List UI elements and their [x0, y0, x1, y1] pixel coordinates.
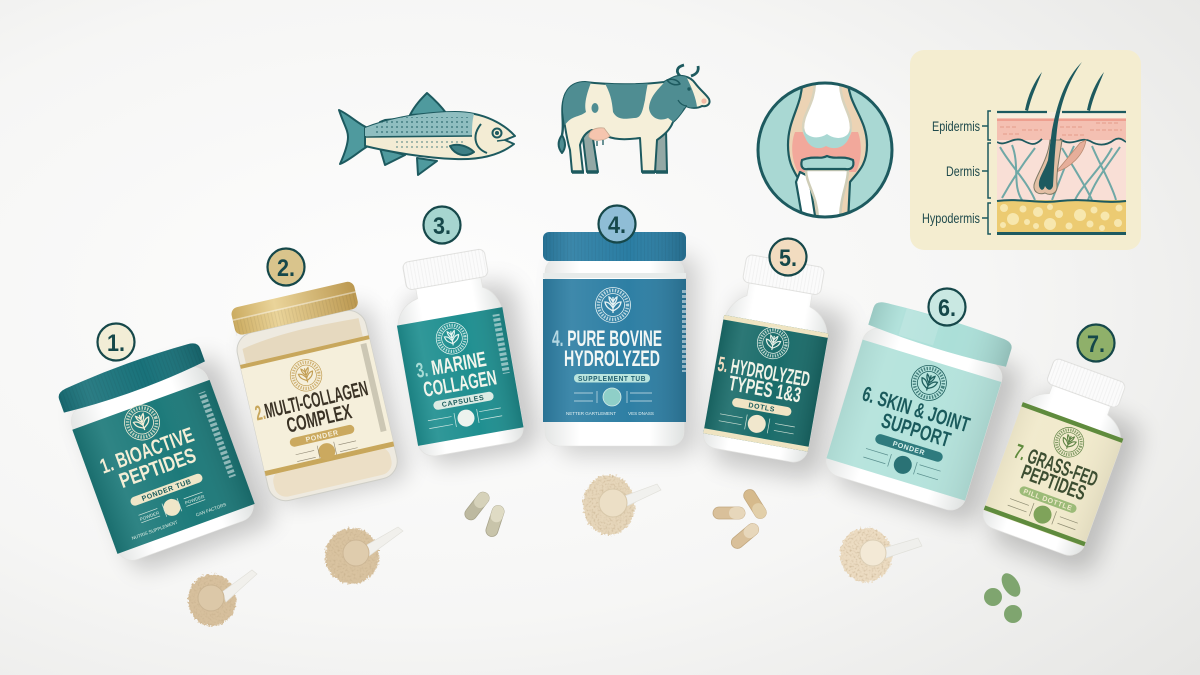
- product 6: skin and joint tub: [820, 298, 1031, 527]
- label: PILL DOTTLE: [1022, 488, 1073, 513]
- powder scoop 4: [583, 475, 661, 535]
- label: PONDER TUB: [141, 478, 193, 503]
- badge 7: 7.: [1087, 331, 1105, 358]
- product 3: marine collagen capsules: [386, 244, 542, 468]
- powder scoop 1: [188, 570, 257, 626]
- cream label: 2.MULTI-COLLAGEN: [253, 377, 370, 425]
- label: 3. MARINE: [414, 348, 488, 383]
- tablets: grass-fed: [984, 570, 1024, 623]
- capsules: hydrolyzed: [713, 487, 769, 551]
- product 2: multi-collagen jar: [227, 278, 411, 509]
- icon: cow: [559, 65, 710, 172]
- capsules: marine: [462, 490, 506, 538]
- label: Epidermis: Epidermis: [932, 118, 980, 134]
- panel: skin layers: [910, 50, 1141, 250]
- label: 5. HYDROLYZED: [716, 353, 812, 392]
- label: SUPPORT: [879, 409, 953, 452]
- bottle body: [979, 375, 1133, 560]
- label: Dermis: Dermis: [946, 163, 980, 179]
- label: TYPES 1&3: [727, 372, 803, 407]
- label: 4. PURE BOVINE: [552, 326, 662, 351]
- label: [543, 279, 686, 422]
- badge 4: [598, 206, 636, 242]
- badge 3: 3.: [433, 213, 451, 240]
- badge 2: 2.: [277, 255, 295, 282]
- label: DOTLS: [748, 402, 775, 414]
- lid: [56, 338, 206, 416]
- icon: knee joint: [758, 80, 892, 222]
- badge 6: 6.: [938, 295, 956, 322]
- label: [703, 315, 829, 452]
- label: Hypodermis: Hypodermis: [922, 210, 980, 226]
- icon: fish: [339, 93, 515, 175]
- hairs: [1025, 62, 1104, 190]
- cream label: PONDER: [305, 430, 339, 444]
- product 4: pure bovine tub: [543, 232, 698, 455]
- badge 6: [928, 288, 966, 326]
- lid: [867, 298, 1014, 370]
- label: PEPTIDES: [116, 444, 199, 493]
- label: HYDROLYZED: [564, 346, 660, 371]
- badge 1: [98, 324, 134, 360]
- label: VES DNASS: [628, 411, 654, 416]
- follicle sheath: [1034, 140, 1062, 194]
- label: 6. SKIN & JOINT: [860, 383, 973, 437]
- label: [397, 307, 523, 446]
- label: 7. GRASS-FED: [1011, 440, 1101, 491]
- label: COLLAGEN: [422, 366, 498, 402]
- glass jar: [233, 307, 401, 504]
- bottle body: [701, 279, 835, 464]
- label: SUPPLEMENT TUB: [578, 376, 646, 383]
- cap: [402, 248, 489, 290]
- label: [984, 402, 1123, 547]
- cream label: [240, 335, 394, 476]
- product 1: bioactive peptides tub: [56, 334, 277, 578]
- badge 3: [424, 206, 460, 244]
- label: CAN FACTORS: [195, 502, 227, 517]
- badge 5: [770, 238, 806, 276]
- product 5: hydrolyzed types bottle: [699, 252, 856, 481]
- cream label: COMPLEX: [284, 400, 354, 438]
- label: POWDER: [139, 510, 161, 522]
- label: NETTER GARTLEMENT: [566, 411, 616, 416]
- cap: [1046, 357, 1126, 409]
- badge 5: 5.: [779, 245, 797, 272]
- label: CAPSULES: [441, 395, 485, 409]
- bottle body: [391, 272, 526, 459]
- label: 1. BIOACTIVE: [97, 423, 197, 479]
- badge 7: [1078, 324, 1114, 362]
- badge 2: [268, 248, 304, 286]
- label: PONDER: [892, 441, 926, 457]
- product 7: grass-fed peptides bottle: [974, 352, 1157, 578]
- label: POWDER: [184, 494, 206, 506]
- arrector muscle: [1056, 140, 1086, 172]
- powder scoop 6: [840, 528, 922, 582]
- label: [72, 379, 255, 554]
- badge 1: 1.: [107, 330, 125, 357]
- label: NUTRIS SUPPLEMENT: [131, 519, 179, 541]
- label: [826, 340, 1001, 501]
- lid: [543, 232, 686, 261]
- label: PEPTIDES: [1018, 461, 1089, 505]
- powder scoop 2: [325, 527, 403, 584]
- gold lid: [230, 280, 359, 336]
- cap: [742, 254, 825, 295]
- skin cross-section: [997, 62, 1126, 235]
- badge 4: 4.: [608, 212, 626, 239]
